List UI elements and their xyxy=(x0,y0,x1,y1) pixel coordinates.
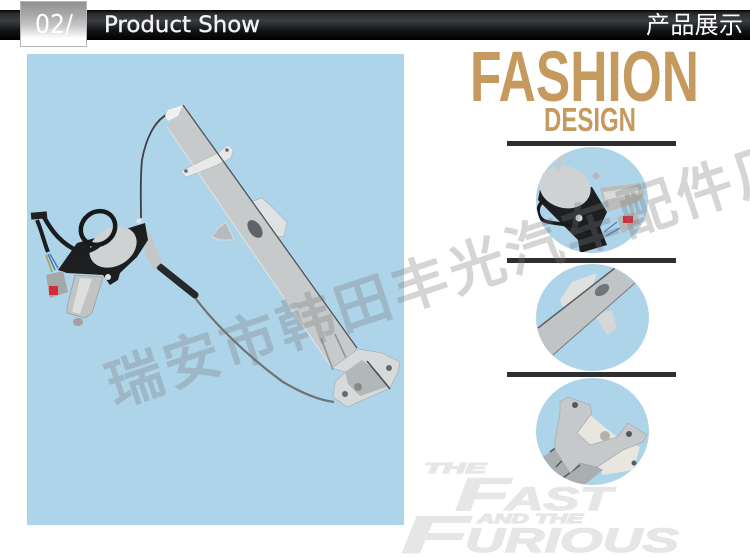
decorative logo: The Fast and the Furious: THE xyxy=(424,460,488,477)
header bar xyxy=(0,10,750,40)
thumbnail: motor detail xyxy=(534,147,648,253)
heading: Chinese section title: 产品展示 xyxy=(646,12,743,39)
decorative logo: The Fast and the Furious: F xyxy=(455,468,514,520)
section number tab xyxy=(20,2,86,46)
cable sleeve xyxy=(160,267,195,295)
lower cable xyxy=(193,295,334,402)
divider bar 1 xyxy=(507,141,676,146)
decorative logo: The Fast and the Furious: AND THE xyxy=(475,511,584,526)
lower mounting bracket xyxy=(332,349,400,407)
divider bar 3 xyxy=(507,372,676,377)
decorative logo: The Fast and the Furious xyxy=(401,460,680,557)
motor assembly xyxy=(31,204,162,326)
heading: Product Show: Product Show xyxy=(104,13,260,38)
window regulator rail xyxy=(165,105,357,370)
decorative logo: The Fast and the Furious: AST xyxy=(503,481,616,517)
thumbnail: lower bracket detail xyxy=(536,378,649,486)
section number tab: 02/ xyxy=(35,10,73,40)
upper cable xyxy=(141,114,168,218)
panel: product photo on blue background xyxy=(27,54,404,525)
divider bar 2 xyxy=(507,258,676,263)
thumbnail: rail bracket detail xyxy=(536,264,649,371)
heading: DESIGN: DESIGN xyxy=(544,101,636,138)
